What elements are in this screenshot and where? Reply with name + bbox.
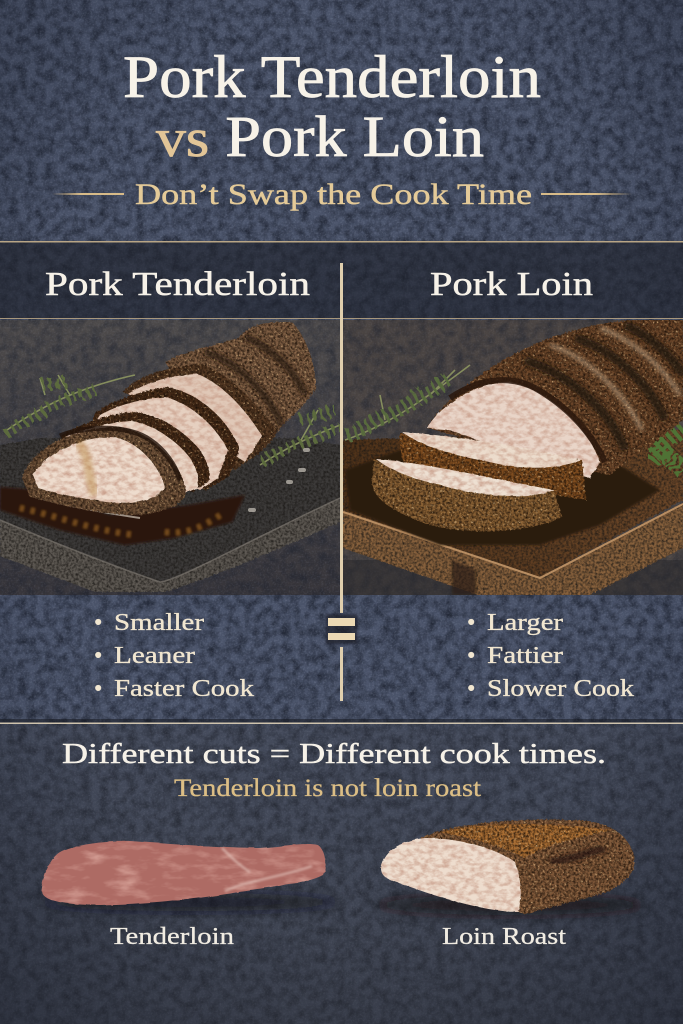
- bullet panel: loin traits: Slower Cook: [487, 676, 634, 702]
- bullet panel: tenderloin traits: •: [94, 610, 102, 636]
- bullet panel: loin traits: •: [467, 643, 475, 669]
- herbs: [4, 375, 340, 465]
- sauce: [345, 450, 660, 545]
- title line 1: Pork Tenderloin: [123, 44, 541, 110]
- slice 3: [90, 387, 239, 490]
- comparison header band: [0, 241, 683, 319]
- title: [123, 44, 541, 169]
- bullet panel: tenderloin traits: Leaner: [114, 643, 195, 669]
- herbs: [345, 365, 470, 440]
- main cut face: [427, 382, 600, 478]
- column heading: tenderloin: Pork Tenderloin: [45, 266, 310, 303]
- section rule: [0, 719, 683, 724]
- bullet panel: loin traits: Larger: [487, 610, 563, 636]
- photo: sliced pork loin on wood board: [343, 319, 683, 595]
- takeaway text: [62, 738, 606, 802]
- wood board: [343, 430, 683, 577]
- label: tenderloin: Tenderloin: [110, 924, 234, 950]
- title line 2: vs Pork Loin: [156, 104, 484, 169]
- photo: sliced pork tenderloin on stone slab: [0, 320, 340, 595]
- bullet panel: loin traits: [467, 610, 634, 702]
- front slice: [22, 427, 186, 515]
- slice 2: [60, 412, 210, 492]
- bullet panel: tenderloin traits: [94, 610, 254, 702]
- column heading: loin: Pork Loin: [430, 266, 593, 303]
- raw tenderloin: [40, 841, 340, 911]
- takeaway headline: Different cuts = Different cook times.: [62, 738, 606, 770]
- bullet panel: tenderloin traits: •: [94, 643, 102, 669]
- center divider with equals sign: [326, 263, 357, 701]
- salt crystals: [250, 450, 308, 510]
- label: loin roast: Loin Roast: [442, 924, 566, 950]
- bullet panel: loin traits: Fattier: [487, 643, 563, 669]
- sauce pool: [0, 487, 245, 545]
- bullet panel: tenderloin traits: Smaller: [114, 610, 204, 636]
- roast body: [427, 319, 683, 475]
- seared loin roast: [375, 820, 645, 915]
- bullet panel: loin traits: •: [467, 676, 475, 702]
- loin cut face: [381, 838, 521, 912]
- bullet panel: tenderloin traits: •: [94, 676, 102, 702]
- bullet panel: tenderloin traits: Faster Cook: [114, 676, 254, 702]
- front slice: [372, 460, 562, 531]
- stone slab: [0, 438, 340, 590]
- roast body: [165, 322, 316, 470]
- bullet panel: loin traits: •: [467, 610, 475, 636]
- middle slice: [400, 433, 586, 500]
- takeaway subline: Tenderloin is not loin roast: [174, 775, 481, 802]
- subtitle with flanking rules: Don’t Swap the Cook Time: [135, 178, 532, 211]
- slice 4: [123, 364, 277, 470]
